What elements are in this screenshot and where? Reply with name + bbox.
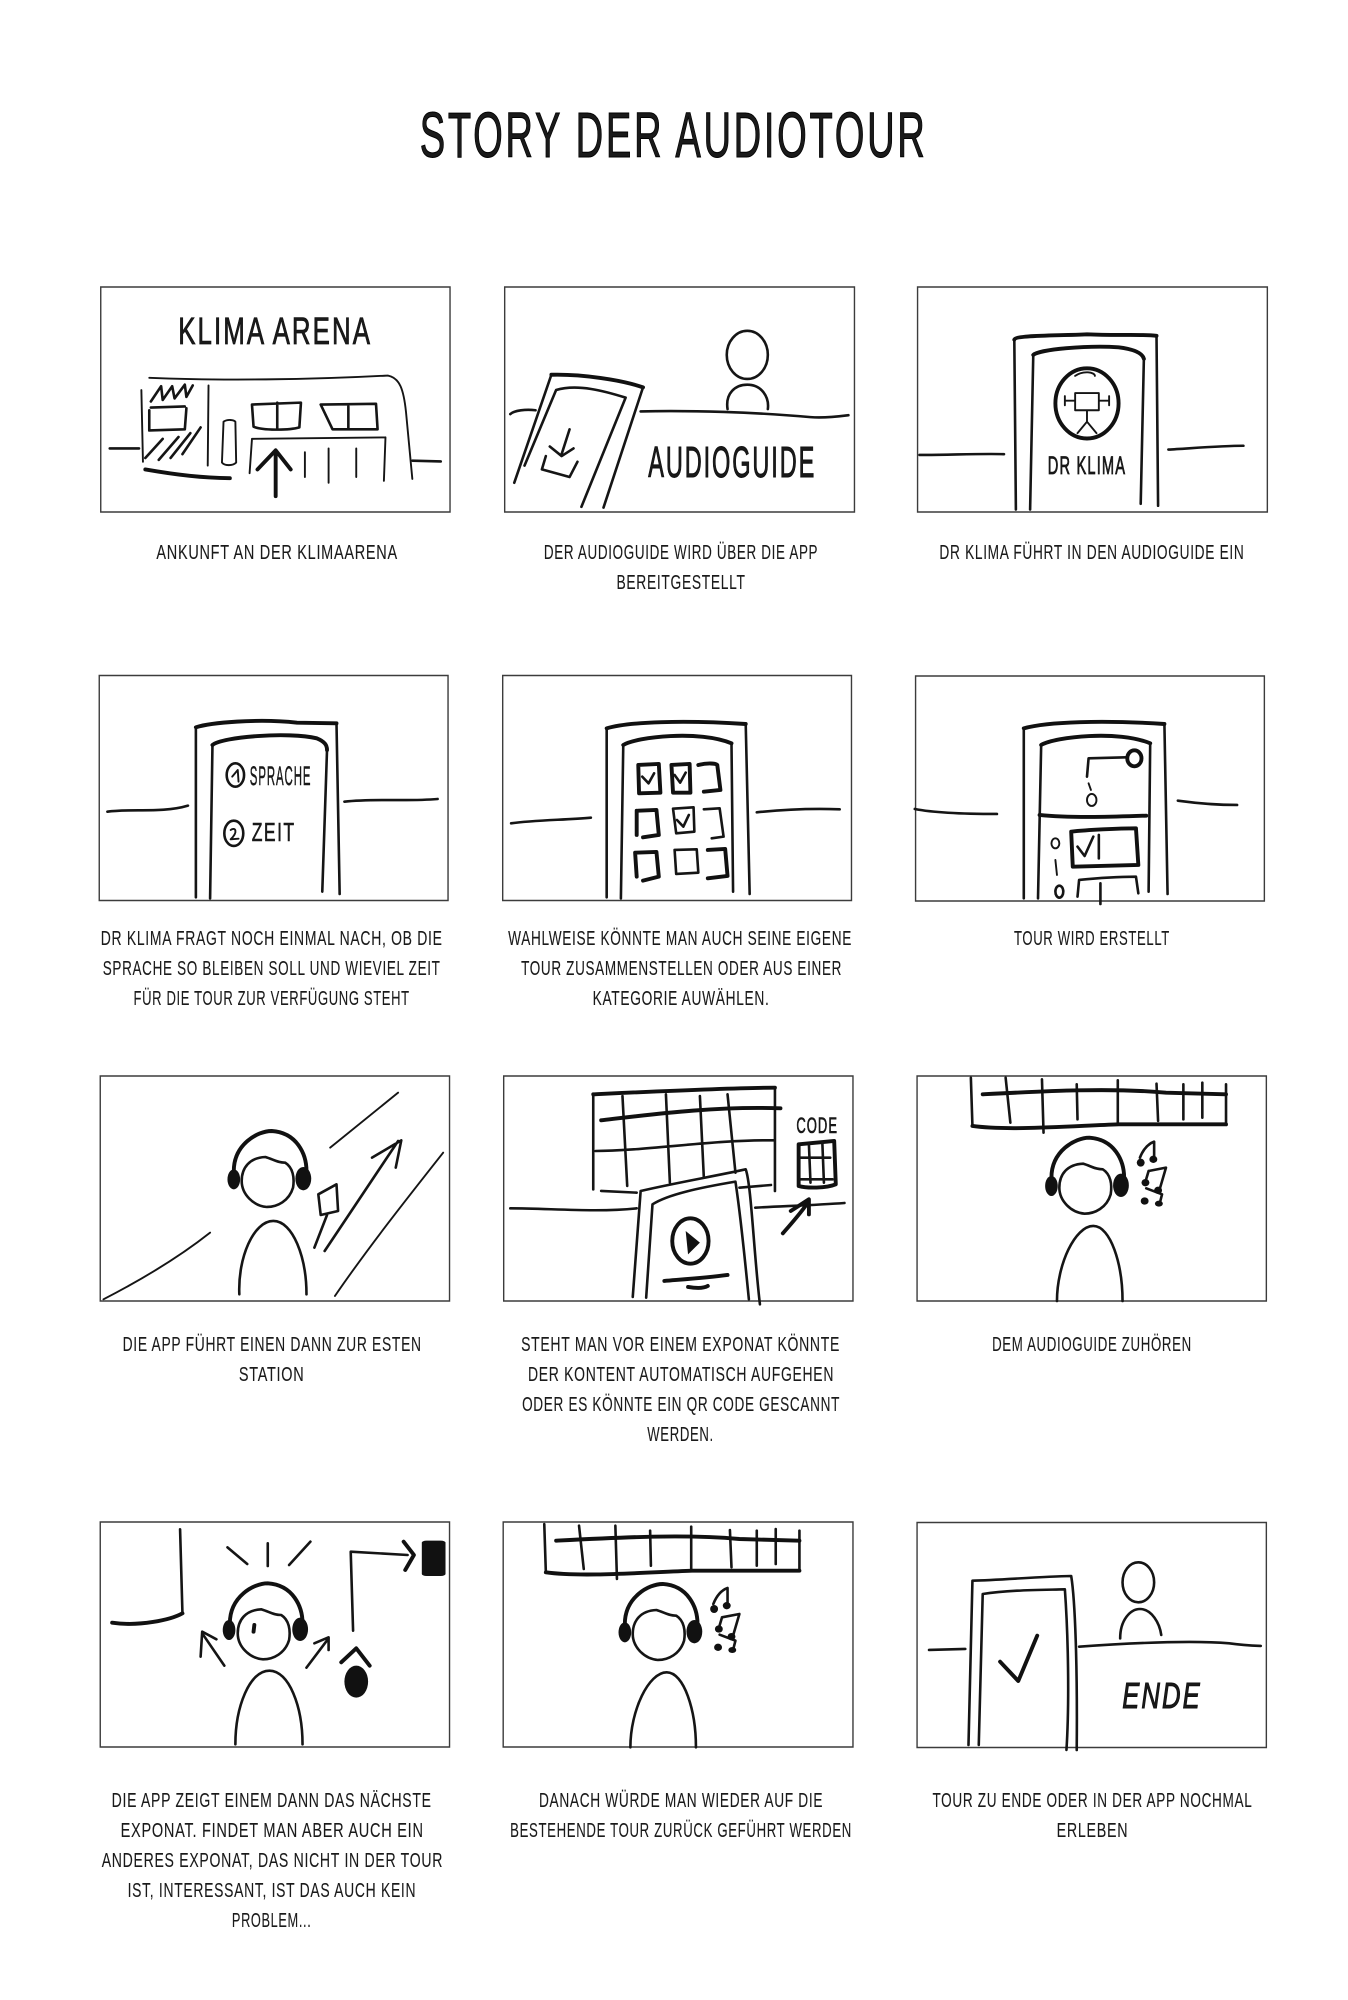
sketch label: Zeit: ZEIT <box>252 819 296 847</box>
caption 2 <box>544 542 818 594</box>
caption 6: TOUR WIRD ERSTELLT <box>1014 928 1170 950</box>
sketch label: Ende: ENDE <box>1122 1676 1202 1716</box>
caption 12 <box>932 1790 1252 1842</box>
sketch: tablet and person at counter <box>510 331 848 508</box>
sketch label: Klima Arena: KLIMA ARENA <box>178 311 372 353</box>
sketch label: Audioguide: AUDIOGUIDE <box>648 438 816 487</box>
caption 12: ERLEBEN <box>1057 1820 1128 1842</box>
caption 8: ODER ES KÖNNTE EIN QR CODE GESCANNT <box>522 1394 840 1416</box>
sketch: phone with Dr Klima robot <box>920 334 1243 509</box>
sketch: exhibit, tablet with play button, QR code <box>510 1088 844 1304</box>
caption 11: DANACH WÜRDE MAN WIEDER AUF DIE <box>539 1790 823 1812</box>
caption 11 <box>510 1790 852 1842</box>
panel 3: Dr Klima on phone <box>918 287 1267 512</box>
panel 2: audioguide desk <box>505 287 854 512</box>
title: STORY DER AUDIOTOUR <box>420 99 928 171</box>
storyboard content <box>99 99 1267 1932</box>
sketch: person with direction arrows <box>112 1529 446 1744</box>
sketch: phone with tile grid <box>511 722 840 898</box>
caption 9: DEM AUDIOGUIDE ZUHÖREN <box>992 1334 1192 1356</box>
caption 10: EXPONAT. FINDET MAN ABER AUCH EIN <box>121 1820 424 1842</box>
caption 5: WAHLWEISE KÖNNTE MAN AUCH SEINE EIGENE <box>508 928 852 950</box>
sketch: phone with check mark and person at counter <box>929 1562 1261 1750</box>
caption 10: IST, INTERESSANT, IST DAS AUCH KEIN <box>128 1880 416 1902</box>
caption 4: DR KLIMA FRAGT NOCH EINMAL NACH, OB DIE <box>101 928 443 950</box>
panel 11: back to the tour <box>503 1522 853 1747</box>
caption 7: STATION <box>239 1364 304 1386</box>
panel 5: choose tour items <box>503 676 851 900</box>
caption 5 <box>508 928 852 1010</box>
caption 11: BESTEHENDE TOUR ZURÜCK GEFÜHRT WERDEN <box>510 1820 852 1842</box>
panel 10: next exhibit directions <box>100 1522 450 1747</box>
caption 2: DER AUDIOGUIDE WIRD ÜBER DIE APP <box>544 542 818 564</box>
panel 4: language and time: SPRACHE <box>250 761 311 791</box>
sketch label: Dr Klima: DR KLIMA <box>1048 452 1126 480</box>
panel 7: app leads to first station <box>100 1076 450 1301</box>
panel 9: listening to the audioguide <box>917 1076 1266 1301</box>
caption 4 <box>101 928 443 1010</box>
sketch label: Code: CODE <box>796 1113 838 1138</box>
sketch: person back on tour under exhibit <box>544 1524 799 1747</box>
panel 6: tour is created <box>915 676 1264 904</box>
caption 10: DIE APP ZEIGT EINEM DANN DAS NÄCHSTE <box>112 1790 432 1812</box>
caption 5: KATEGORIE AUWÄHLEN. <box>593 988 770 1010</box>
caption 10: ANDERES EXPONAT, DAS NICHT IN DER TOUR <box>102 1850 443 1872</box>
panel 4: language and time <box>99 676 448 900</box>
panel 12: end of tour <box>917 1522 1266 1750</box>
caption 7: DIE APP FÜHRT EINEN DANN ZUR ESTEN <box>123 1334 422 1356</box>
panel 1: arrival at Klima Arena <box>101 287 450 512</box>
caption 1: ANKUNFT AN DER KLIMAARENA <box>156 542 398 564</box>
sketch: person with phone and path arrow <box>103 1093 443 1299</box>
sketch: phone asking language and time <box>107 721 438 898</box>
caption 10 <box>102 1790 443 1932</box>
sketch: phone with route and list <box>915 722 1237 904</box>
caption 4: FÜR DIE TOUR ZUR VERFÜGUNG STEHT <box>134 988 410 1010</box>
caption 8: STEHT MAN VOR EINEM EXPONAT KÖNNTE <box>521 1334 840 1356</box>
caption 4: SPRACHE SO BLEIBEN SOLL UND WIEVIEL ZEIT <box>103 958 441 980</box>
caption 10: PROBLEM... <box>232 1910 311 1932</box>
sketch: person listening under exhibit <box>971 1078 1226 1301</box>
sketch: building with entrance arrow <box>110 376 441 496</box>
caption 8: DER KONTENT AUTOMATISCH AUFGEHEN <box>528 1364 834 1386</box>
caption 8 <box>521 1334 840 1446</box>
caption 5: TOUR ZUSAMMENSTELLEN ODER AUS EINER <box>521 958 842 980</box>
caption 8: WERDEN. <box>647 1424 714 1446</box>
panel 8: exhibit with QR code <box>504 1076 853 1304</box>
caption 7 <box>123 1334 422 1386</box>
caption 2: BEREITGESTELLT <box>616 572 746 594</box>
